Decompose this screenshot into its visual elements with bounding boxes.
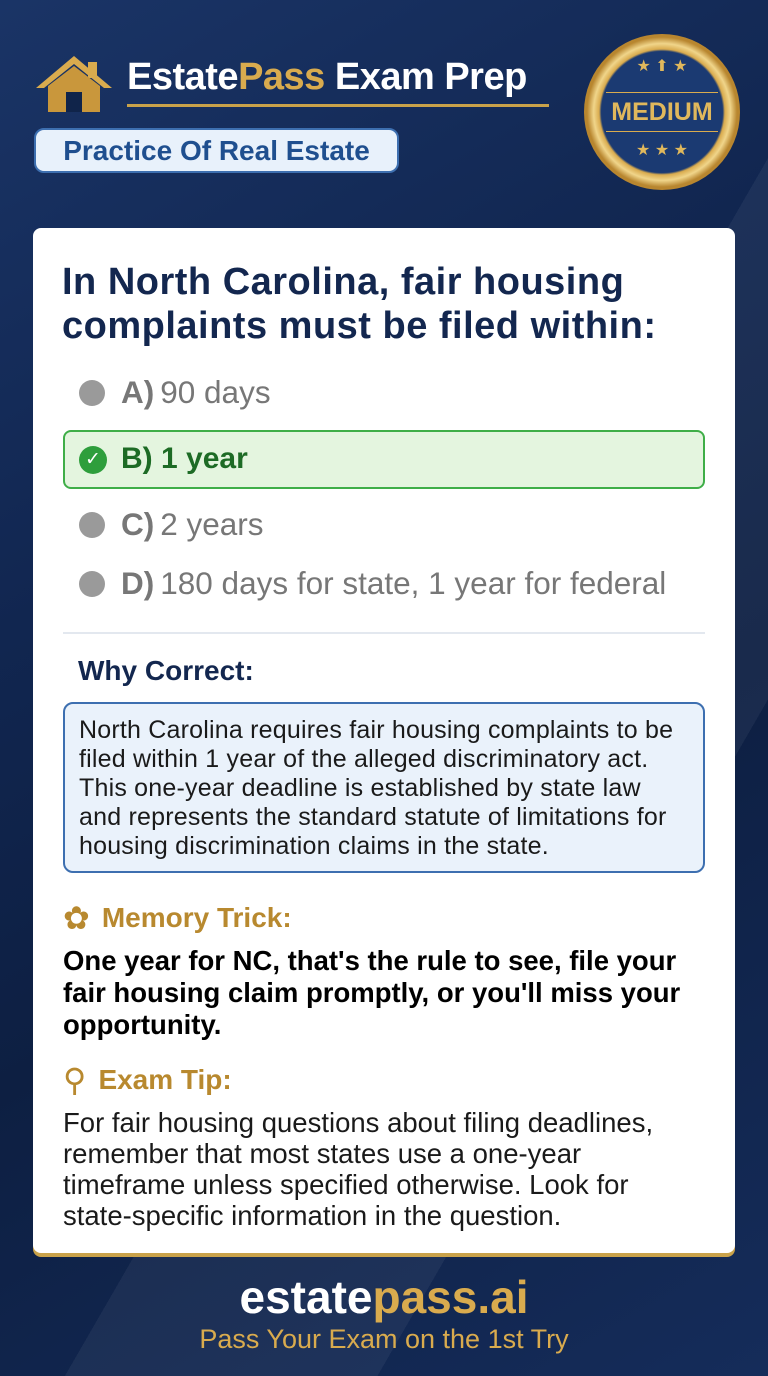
option A: 90 days (160, 374, 271, 410)
option C: 2 years (160, 506, 264, 542)
explanation box (63, 702, 705, 873)
category badge: Practice Of Real Estate (63, 135, 370, 166)
footer tagline: Pass Your Exam on the 1st Try (199, 1324, 569, 1354)
why correct heading: Why Correct: (78, 655, 254, 686)
explanation box: North Carolina requires fair housing complaints to be (79, 716, 673, 744)
option D: D) (121, 565, 154, 601)
option D: 180 days for state, 1 year for federal (160, 565, 666, 601)
option A (79, 374, 271, 410)
option C: C) (121, 506, 154, 542)
memory trick heading: Memory Trick: (102, 902, 292, 933)
question (62, 261, 656, 347)
exam tip heading: ⚲ (63, 1062, 86, 1098)
exam tip heading: Exam Tip: (98, 1064, 232, 1095)
exam tip heading (63, 1062, 232, 1098)
difficulty badge: ★ ⬆ ★ (636, 58, 687, 75)
exam tip text: state-specific information in the question. (63, 1200, 561, 1231)
question: In North Carolina, fair housing (62, 261, 624, 303)
explanation box: filed within 1 year of the alleged discriminatory act. (79, 745, 648, 773)
difficulty badge (584, 34, 740, 190)
option A: A) (121, 374, 154, 410)
header: brand title: EstatePass Exam Prep (127, 56, 527, 98)
option B correct (63, 430, 705, 489)
memory trick text: fair housing claim promptly, or you'll miss your (63, 977, 680, 1008)
explanation box: This one-year deadline is established by state law (79, 774, 641, 802)
difficulty badge: MEDIUM (611, 98, 713, 126)
exam tip text (63, 1107, 653, 1231)
option C (79, 506, 264, 542)
option B correct: ✓ (85, 449, 101, 470)
exam tip text: timeframe unless specified otherwise. Look for (63, 1169, 629, 1200)
question: complaints must be filed within: (62, 305, 656, 347)
exam tip text: remember that most states use a one-year (63, 1138, 581, 1169)
difficulty badge: ★ ★ ★ (636, 142, 688, 159)
explanation box: and represents the standard statute of limitations for (79, 803, 667, 831)
exam tip text: For fair housing questions about filing deadlines, (63, 1107, 653, 1138)
memory trick text: opportunity. (63, 1009, 221, 1040)
memory trick heading: ✿ (63, 900, 90, 936)
explanation box: housing discrimination claims in the state. (79, 832, 549, 860)
main card (33, 228, 735, 1253)
memory trick text: One year for NC, that's the rule to see, file your (63, 945, 676, 976)
option B correct: B) 1 year (121, 442, 248, 475)
header: logo icon (36, 56, 112, 112)
category badge (34, 128, 399, 173)
memory trick text (63, 945, 680, 1040)
footer brand: estatepass.ai (240, 1271, 528, 1323)
